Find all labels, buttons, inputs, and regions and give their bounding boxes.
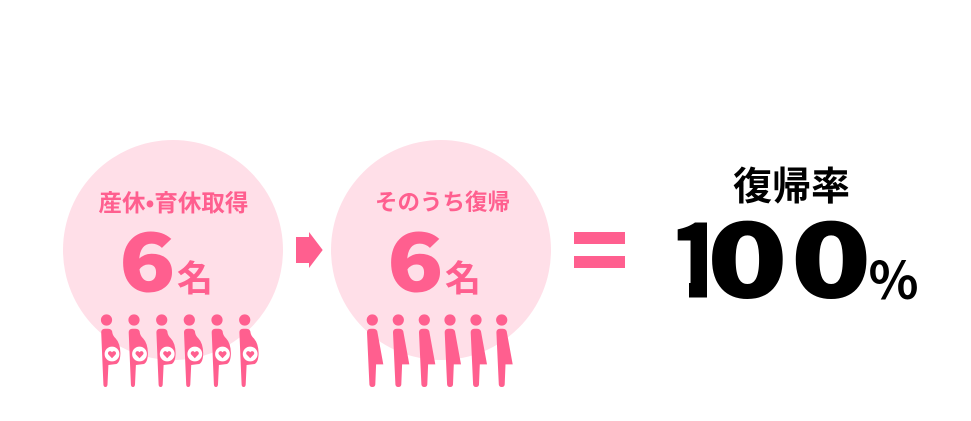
number: 6 people: 名 <box>177 250 213 302</box>
number: 6 people: 名 <box>445 250 481 302</box>
number: 6 people <box>388 202 481 314</box>
number: 100 percent: 00 <box>708 181 875 326</box>
number: 6 people: 6 <box>120 202 175 314</box>
number: 6 people: 6 <box>388 202 443 314</box>
number: 100 percent: % <box>868 239 919 314</box>
heading: leave takers: 産休•育休取得 <box>99 184 248 218</box>
icons: six pregnant women <box>101 314 259 387</box>
number: 100 percent <box>678 220 917 300</box>
panel: maternity and childcare leave takers <box>63 140 283 387</box>
number: 100 percent: 1 <box>668 182 726 328</box>
icons: six women <box>367 314 513 387</box>
number: 6 people <box>120 202 213 314</box>
background circle: returned <box>331 140 551 360</box>
result: return rate <box>678 166 917 300</box>
heading: return rate: 復帰率 <box>733 156 850 212</box>
heading: returned: そのうち復帰 <box>375 185 510 217</box>
equals sign <box>574 232 625 268</box>
panel: returned to work <box>331 140 551 387</box>
arrow <box>296 232 323 268</box>
background circle: leave takers <box>63 140 283 360</box>
